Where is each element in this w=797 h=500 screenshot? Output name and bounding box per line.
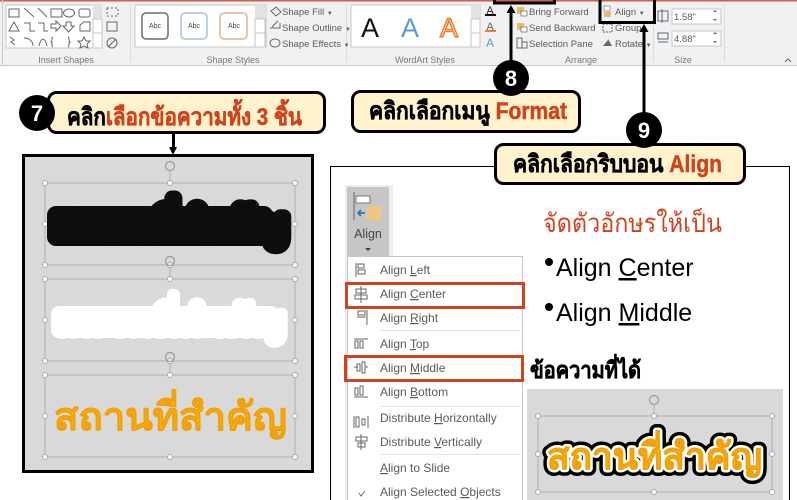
text block: align middle bullet: Align Middle (556, 299, 692, 327)
align dropdown menu: Distribute Vertically (380, 435, 482, 449)
layered result text: สถานที่สำคัญ (547, 430, 762, 478)
ribbon group labels (38, 55, 692, 65)
icon: number 7 (19, 95, 55, 131)
selection frames (42, 162, 298, 460)
callout: step 7 (48, 92, 324, 132)
wordart gallery: A (486, 36, 494, 50)
size fields: 1.58" (674, 12, 696, 23)
wordart gallery: A (486, 21, 494, 33)
icon: number 8: 8 (505, 66, 517, 91)
size fields: 4.88" (674, 34, 696, 45)
shape fill, outline and effects commands (270, 7, 351, 50)
ribbon group labels: Arrange (565, 55, 597, 65)
align dropdown button: Align (354, 227, 382, 241)
icon: number 8 (493, 60, 529, 96)
arrange commands: Rotate ▼ (615, 39, 652, 50)
panel: resulting text preview (527, 389, 783, 500)
align dropdown menu: Align Selected Objects (380, 485, 501, 499)
shape styles gallery (135, 5, 266, 47)
align dropdown menu: Align Middle (380, 361, 446, 375)
size fields (658, 9, 791, 62)
shape fill, outline and effects commands: Shape Fill ▼ (282, 7, 333, 18)
wordart gallery: A (361, 13, 379, 43)
ribbon toolbar (0, 0, 797, 66)
ribbon group labels: WordArt Styles (395, 55, 455, 65)
align dropdown menu: Align Top (380, 337, 429, 351)
align dropdown menu: Align Center (380, 287, 446, 301)
highlight: align button (600, 0, 654, 22)
arrange commands: Bring Forward (529, 7, 589, 18)
highlight: align center (346, 284, 524, 308)
text block: align center bullet: Align Center (556, 254, 694, 282)
orange text layer: สถานที่สำคัญ (54, 390, 287, 439)
callout: step 8 (352, 92, 580, 132)
layered result text: สถานที่สำคัญ (547, 430, 762, 478)
heading: result: ข้อความที่ได้ (530, 353, 641, 383)
shape fill, outline and effects commands: Shape Effects ▼ (282, 39, 350, 50)
arrange commands (517, 6, 652, 50)
arrow: step 7 to panel (169, 132, 177, 155)
ribbon group labels: Size (674, 55, 692, 65)
wordart gallery: A (440, 13, 458, 43)
white outlined text layer: สถานที่สำคัญ (55, 294, 285, 343)
align dropdown menu (348, 256, 522, 500)
icon: number 7: 7 (31, 101, 43, 126)
panel: selected text layers (24, 156, 312, 472)
icon: number 9 (626, 112, 662, 148)
black outlined text layer: สถานที่สำคัญ (54, 198, 286, 247)
wordart gallery: A (486, 5, 494, 17)
layered result text: สถานที่สำคัญ (547, 430, 762, 478)
shape styles gallery: Abc (188, 23, 201, 30)
align dropdown menu: Align Left (380, 263, 431, 277)
ribbon group labels: Shape Styles (206, 55, 260, 65)
shape fill, outline and effects commands: Shape Outline ▼ (282, 23, 351, 34)
highlight: format tab (494, 0, 554, 3)
heading: step 7 text: คลิกเลือกข้อความทั้ง 3 ชิ้น (67, 98, 303, 131)
align dropdown menu: Align Bottom (380, 385, 448, 399)
shape styles gallery: Abc (149, 23, 162, 30)
arrow: step 8 to format tab (506, 5, 516, 62)
arrange commands: Align ▼ (615, 7, 645, 18)
align dropdown menu: Align to Slide (380, 461, 450, 475)
arrow: step 9 to align button (640, 24, 648, 115)
arrange commands: Group (615, 23, 641, 34)
align dropdown button (345, 185, 393, 500)
menu icons (354, 263, 368, 496)
shape styles gallery: Abc (228, 23, 241, 30)
heading: step 9 text: คลิกเลือกริบบอน Align (513, 151, 722, 178)
callout: step 9 (496, 144, 744, 184)
wordart gallery: A (401, 13, 419, 43)
align dropdown menu: Distribute Horizontally (380, 411, 497, 425)
heading: step 8 text: คลิกเลือกเมนู Format (369, 98, 567, 126)
panel: align explanation frame (330, 166, 790, 500)
icon: number 9: 9 (638, 118, 650, 143)
insert shapes gallery (6, 5, 118, 48)
wordart gallery (351, 5, 496, 50)
arrange commands: Send Backward (529, 23, 596, 34)
arrange commands: Selection Pane (529, 39, 593, 50)
ribbon group labels: Insert Shapes (38, 55, 94, 65)
highlight: align middle (346, 356, 522, 380)
text block: instruction heading: จัดตัวอักษรให้เป็น (543, 207, 722, 238)
align dropdown menu: Align Right (380, 311, 439, 325)
